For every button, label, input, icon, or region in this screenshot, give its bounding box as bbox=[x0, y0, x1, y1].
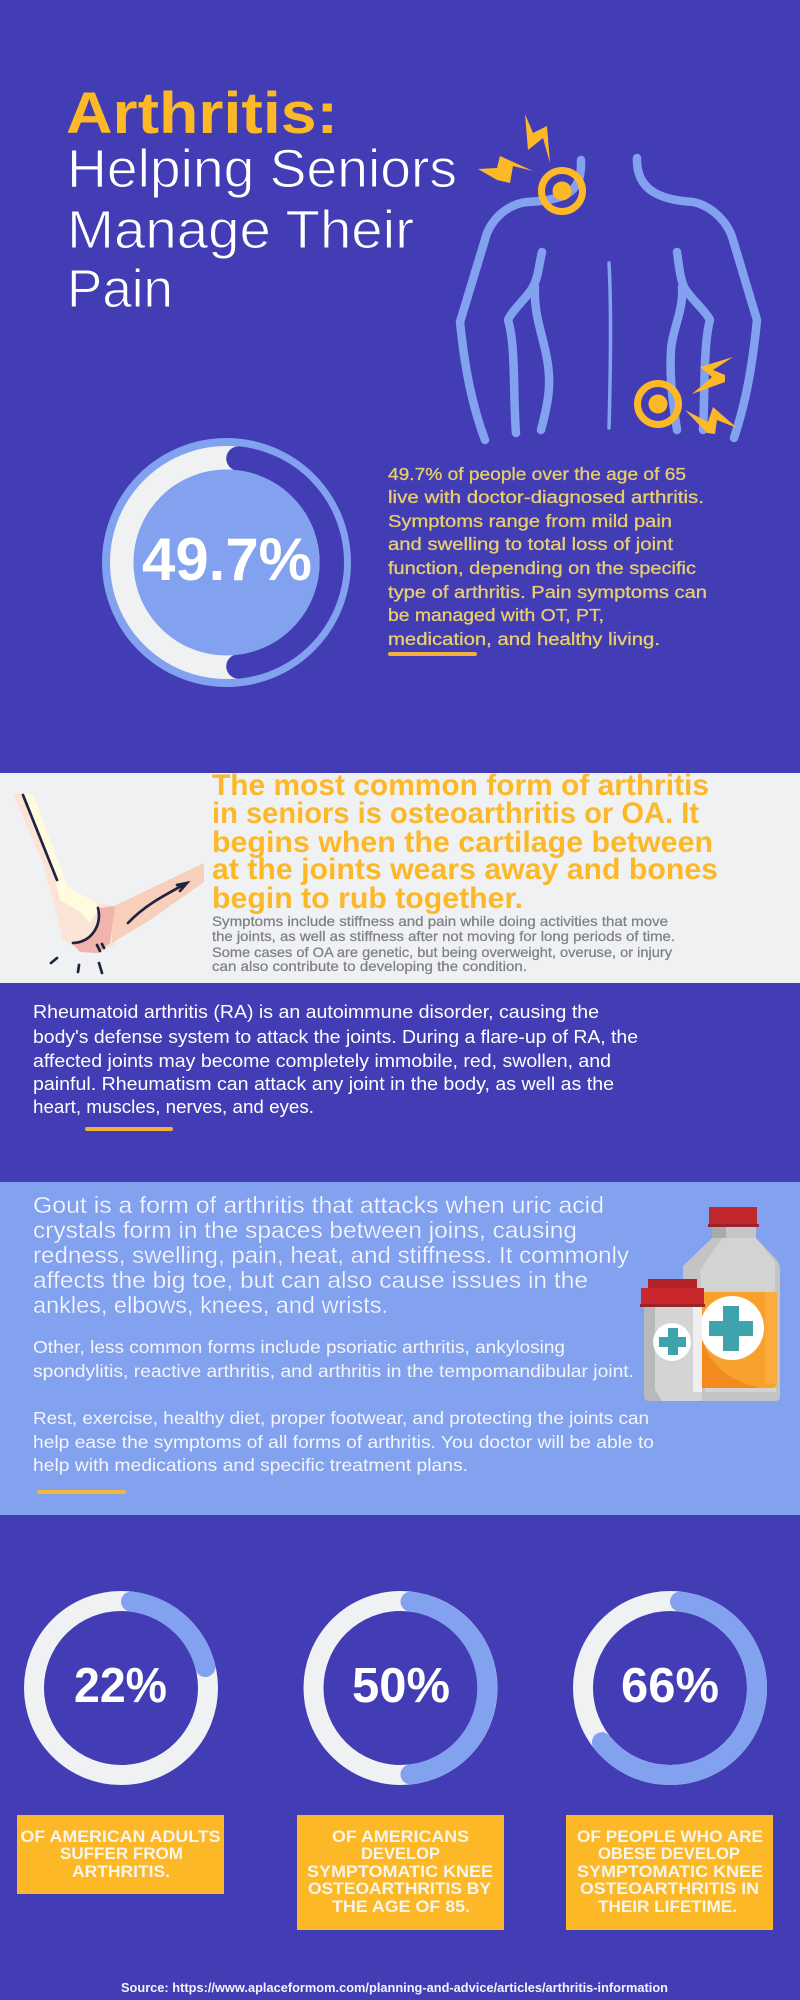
chart: 49.7% donut bbox=[102, 438, 351, 687]
icon: medicine bottles bbox=[640, 1207, 780, 1401]
icon: elbow joint illustration bbox=[13, 794, 204, 973]
text block: gout: ankles, elbows, knees, and wrists. bbox=[33, 1292, 388, 1318]
callout: 50% label: OSTEOARTHRITIS BY bbox=[308, 1879, 492, 1898]
callout: 22% label: OF AMERICAN ADULTS bbox=[20, 1827, 220, 1846]
text block: rheumatoid arthritis bbox=[33, 1002, 638, 1117]
text block: prevalence summary: function, depending on the specific bbox=[388, 558, 696, 578]
text block: rheumatoid arthritis: Rheumatoid arthritis (RA) is an autoimmune disorder, causing the bbox=[33, 1002, 599, 1022]
text block: treatment: Rest, exercise, healthy diet, proper footwear, and protecting the joints can bbox=[33, 1408, 649, 1428]
title: Helping Seniors bbox=[67, 139, 457, 199]
text block: gout: crystals form in the spaces between joins, causing bbox=[33, 1217, 577, 1243]
text block: prevalence summary: 49.7% of people over the age of 65 bbox=[388, 464, 686, 484]
text block: gout: affects the big toe, but can also cause issues in the bbox=[33, 1267, 588, 1293]
heading: osteoarthritis: begin to rub together. bbox=[212, 882, 523, 915]
title: Manage Their bbox=[67, 200, 414, 260]
chart: 22% donut: 22% bbox=[74, 1659, 167, 1713]
text block: prevalence summary: type of arthritis. Pain symptoms can bbox=[388, 582, 707, 602]
callout: 22% label: ARTHRITIS. bbox=[72, 1862, 170, 1881]
text block: treatment bbox=[33, 1408, 654, 1475]
text block: OA symptoms: the joints, as well as stiffness after not moving for long periods of time. bbox=[212, 928, 675, 944]
chart: 22% donut bbox=[34, 1601, 208, 1775]
heading: osteoarthritis: at the joints wears away and bones bbox=[212, 853, 718, 886]
text block: OA symptoms: Some cases of OA are genetic, but being overweight, overuse, or injury bbox=[212, 944, 672, 960]
callout: 66% label: OSTEOARTHRITIS IN bbox=[580, 1879, 759, 1898]
heading: osteoarthritis: The most common form of arthritis bbox=[212, 769, 709, 802]
text block: OA symptoms bbox=[212, 913, 675, 974]
panel: gout and other forms bbox=[0, 1182, 800, 1515]
text block: treatment: help with medications and specific treatment plans. bbox=[33, 1455, 468, 1475]
text block: prevalence summary: be managed with OT, PT, bbox=[388, 605, 604, 625]
title: Pain bbox=[67, 259, 173, 319]
text block: gout bbox=[33, 1192, 629, 1318]
text block: less common forms: Other, less common forms include psoriatic arthritis, ankylosing bbox=[33, 1337, 565, 1357]
chart: 50% donut: 50% bbox=[352, 1659, 450, 1713]
text block: gout: redness, swelling, pain, heat, and stiffness. It commonly bbox=[33, 1242, 629, 1268]
callout: 22% label: SUFFER FROM bbox=[60, 1844, 183, 1863]
text block: rheumatoid arthritis: painful. Rheumatism can attack any joint in the body, as well as the bbox=[33, 1074, 614, 1094]
accent underline bbox=[390, 652, 475, 656]
callout: 50% label bbox=[297, 1815, 504, 1930]
title bbox=[66, 81, 457, 319]
callout: 22% label bbox=[17, 1815, 224, 1894]
icon: lower pain target bbox=[638, 357, 737, 434]
callout: 50% label: THE AGE OF 85. bbox=[332, 1897, 470, 1916]
text block: OA symptoms: can also contribute to developing the condition. bbox=[212, 958, 527, 974]
text block: prevalence summary: live with doctor-diagnosed arthritis. bbox=[388, 487, 704, 507]
source line: Source: https://www.aplaceformom.com/planning-and-advice/articles/arthritis-information bbox=[121, 1980, 668, 1995]
callout: 66% label bbox=[566, 1815, 773, 1930]
title: Arthritis: bbox=[66, 81, 338, 146]
chart: 50% donut bbox=[314, 1601, 488, 1775]
callout: 66% label: OF PEOPLE WHO ARE bbox=[577, 1827, 763, 1846]
callout: 50% label: OF AMERICANS bbox=[332, 1827, 469, 1846]
icon: upper pain target bbox=[478, 114, 582, 212]
text block: gout: Gout is a form of arthritis that attacks when uric acid bbox=[33, 1192, 604, 1218]
text block: prevalence summary: and swelling to total loss of joint bbox=[388, 534, 673, 554]
panel: osteoarthritis bbox=[0, 769, 800, 983]
icon: human back outline with pain points bbox=[460, 114, 757, 440]
accent underline bbox=[87, 1127, 171, 1131]
text block: treatment: help ease the symptoms of all forms of arthritis. You doctor will be able to bbox=[33, 1432, 654, 1452]
heading: osteoarthritis: in seniors is osteoarthritis or OA. It bbox=[212, 797, 699, 830]
text block: prevalence summary bbox=[388, 464, 707, 649]
accent underline bbox=[39, 1490, 124, 1494]
callout: 50% label: SYMPTOMATIC KNEE bbox=[307, 1862, 493, 1881]
text block: rheumatoid arthritis: body's defense system to attack the joints. During a flare-up of RA, the bbox=[33, 1027, 638, 1047]
chart: 66% donut: 66% bbox=[621, 1659, 719, 1713]
text block: rheumatoid arthritis: heart, muscles, nerves, and eyes. bbox=[33, 1097, 314, 1117]
text block: less common forms: spondylitis, reactive arthritis, and arthritis in the tempomandibular joint. bbox=[33, 1361, 634, 1381]
callout: 66% label: OBESE DEVELOP bbox=[598, 1844, 740, 1863]
callout: 66% label: THEIR LIFETIME. bbox=[598, 1897, 737, 1916]
heading: osteoarthritis: begins when the cartilage between bbox=[212, 826, 713, 859]
chart: 66% donut bbox=[583, 1601, 757, 1775]
chart: 49.7% donut: 49.7% bbox=[142, 526, 312, 593]
text block: less common forms bbox=[33, 1337, 634, 1381]
callout: 66% label: SYMPTOMATIC KNEE bbox=[577, 1862, 763, 1881]
text block: rheumatoid arthritis: affected joints may become completely immobile, red, swollen, and bbox=[33, 1051, 611, 1071]
text block: prevalence summary: medication, and healthy living. bbox=[388, 629, 660, 649]
heading: osteoarthritis bbox=[212, 769, 718, 915]
text block: prevalence summary: Symptoms range from mild pain bbox=[388, 511, 672, 531]
callout: 50% label: DEVELOP bbox=[361, 1844, 440, 1863]
text block: OA symptoms: Symptoms include stiffness and pain while doing activities that move bbox=[212, 913, 668, 929]
